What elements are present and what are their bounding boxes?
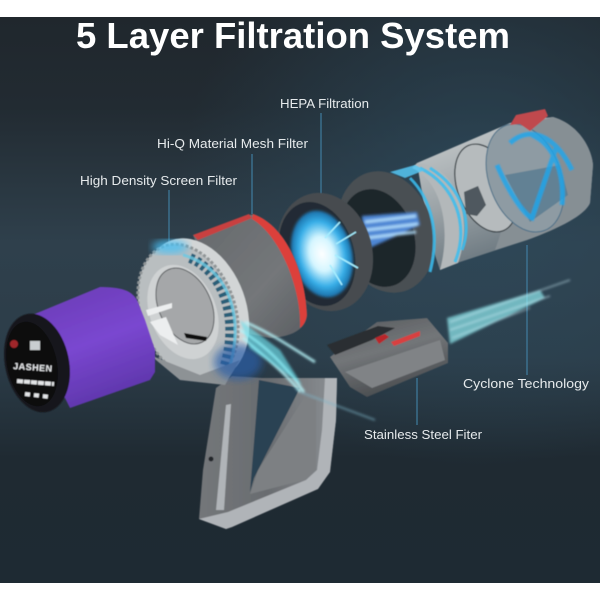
label: Cyclone Technology: Cyclone Technology: [463, 376, 590, 391]
purple battery with display: [0, 287, 155, 419]
filter ring with glowing bands: [322, 159, 466, 305]
dust bin with cyclone: [412, 109, 593, 270]
label: HEPA Filtration: HEPA Filtration: [280, 96, 369, 111]
title: 5 Layer Filtration System: [76, 15, 510, 56]
grey motor body with red trim: [193, 214, 307, 338]
purple battery with display: JASHEN: [13, 361, 52, 374]
handle: [199, 376, 337, 529]
label: Hi-Q Material Mesh Filter: Hi-Q Material Mesh Filter: [157, 136, 309, 151]
label: Stainless Steel Filter: [364, 378, 483, 442]
cyclone air streams from handle: [214, 320, 375, 420]
stainless steel filter housing: [327, 318, 448, 397]
HEPA filter disc: [263, 181, 387, 323]
silver screen filter ring: [120, 223, 268, 395]
label: HEPA Filtration: [280, 96, 369, 198]
cyclone air streams right: [447, 280, 570, 344]
label: Stainless Steel Filter: Stainless Steel Fiter: [364, 427, 483, 442]
label: High Density Screen Filter: High Density Screen Filter: [80, 173, 238, 188]
